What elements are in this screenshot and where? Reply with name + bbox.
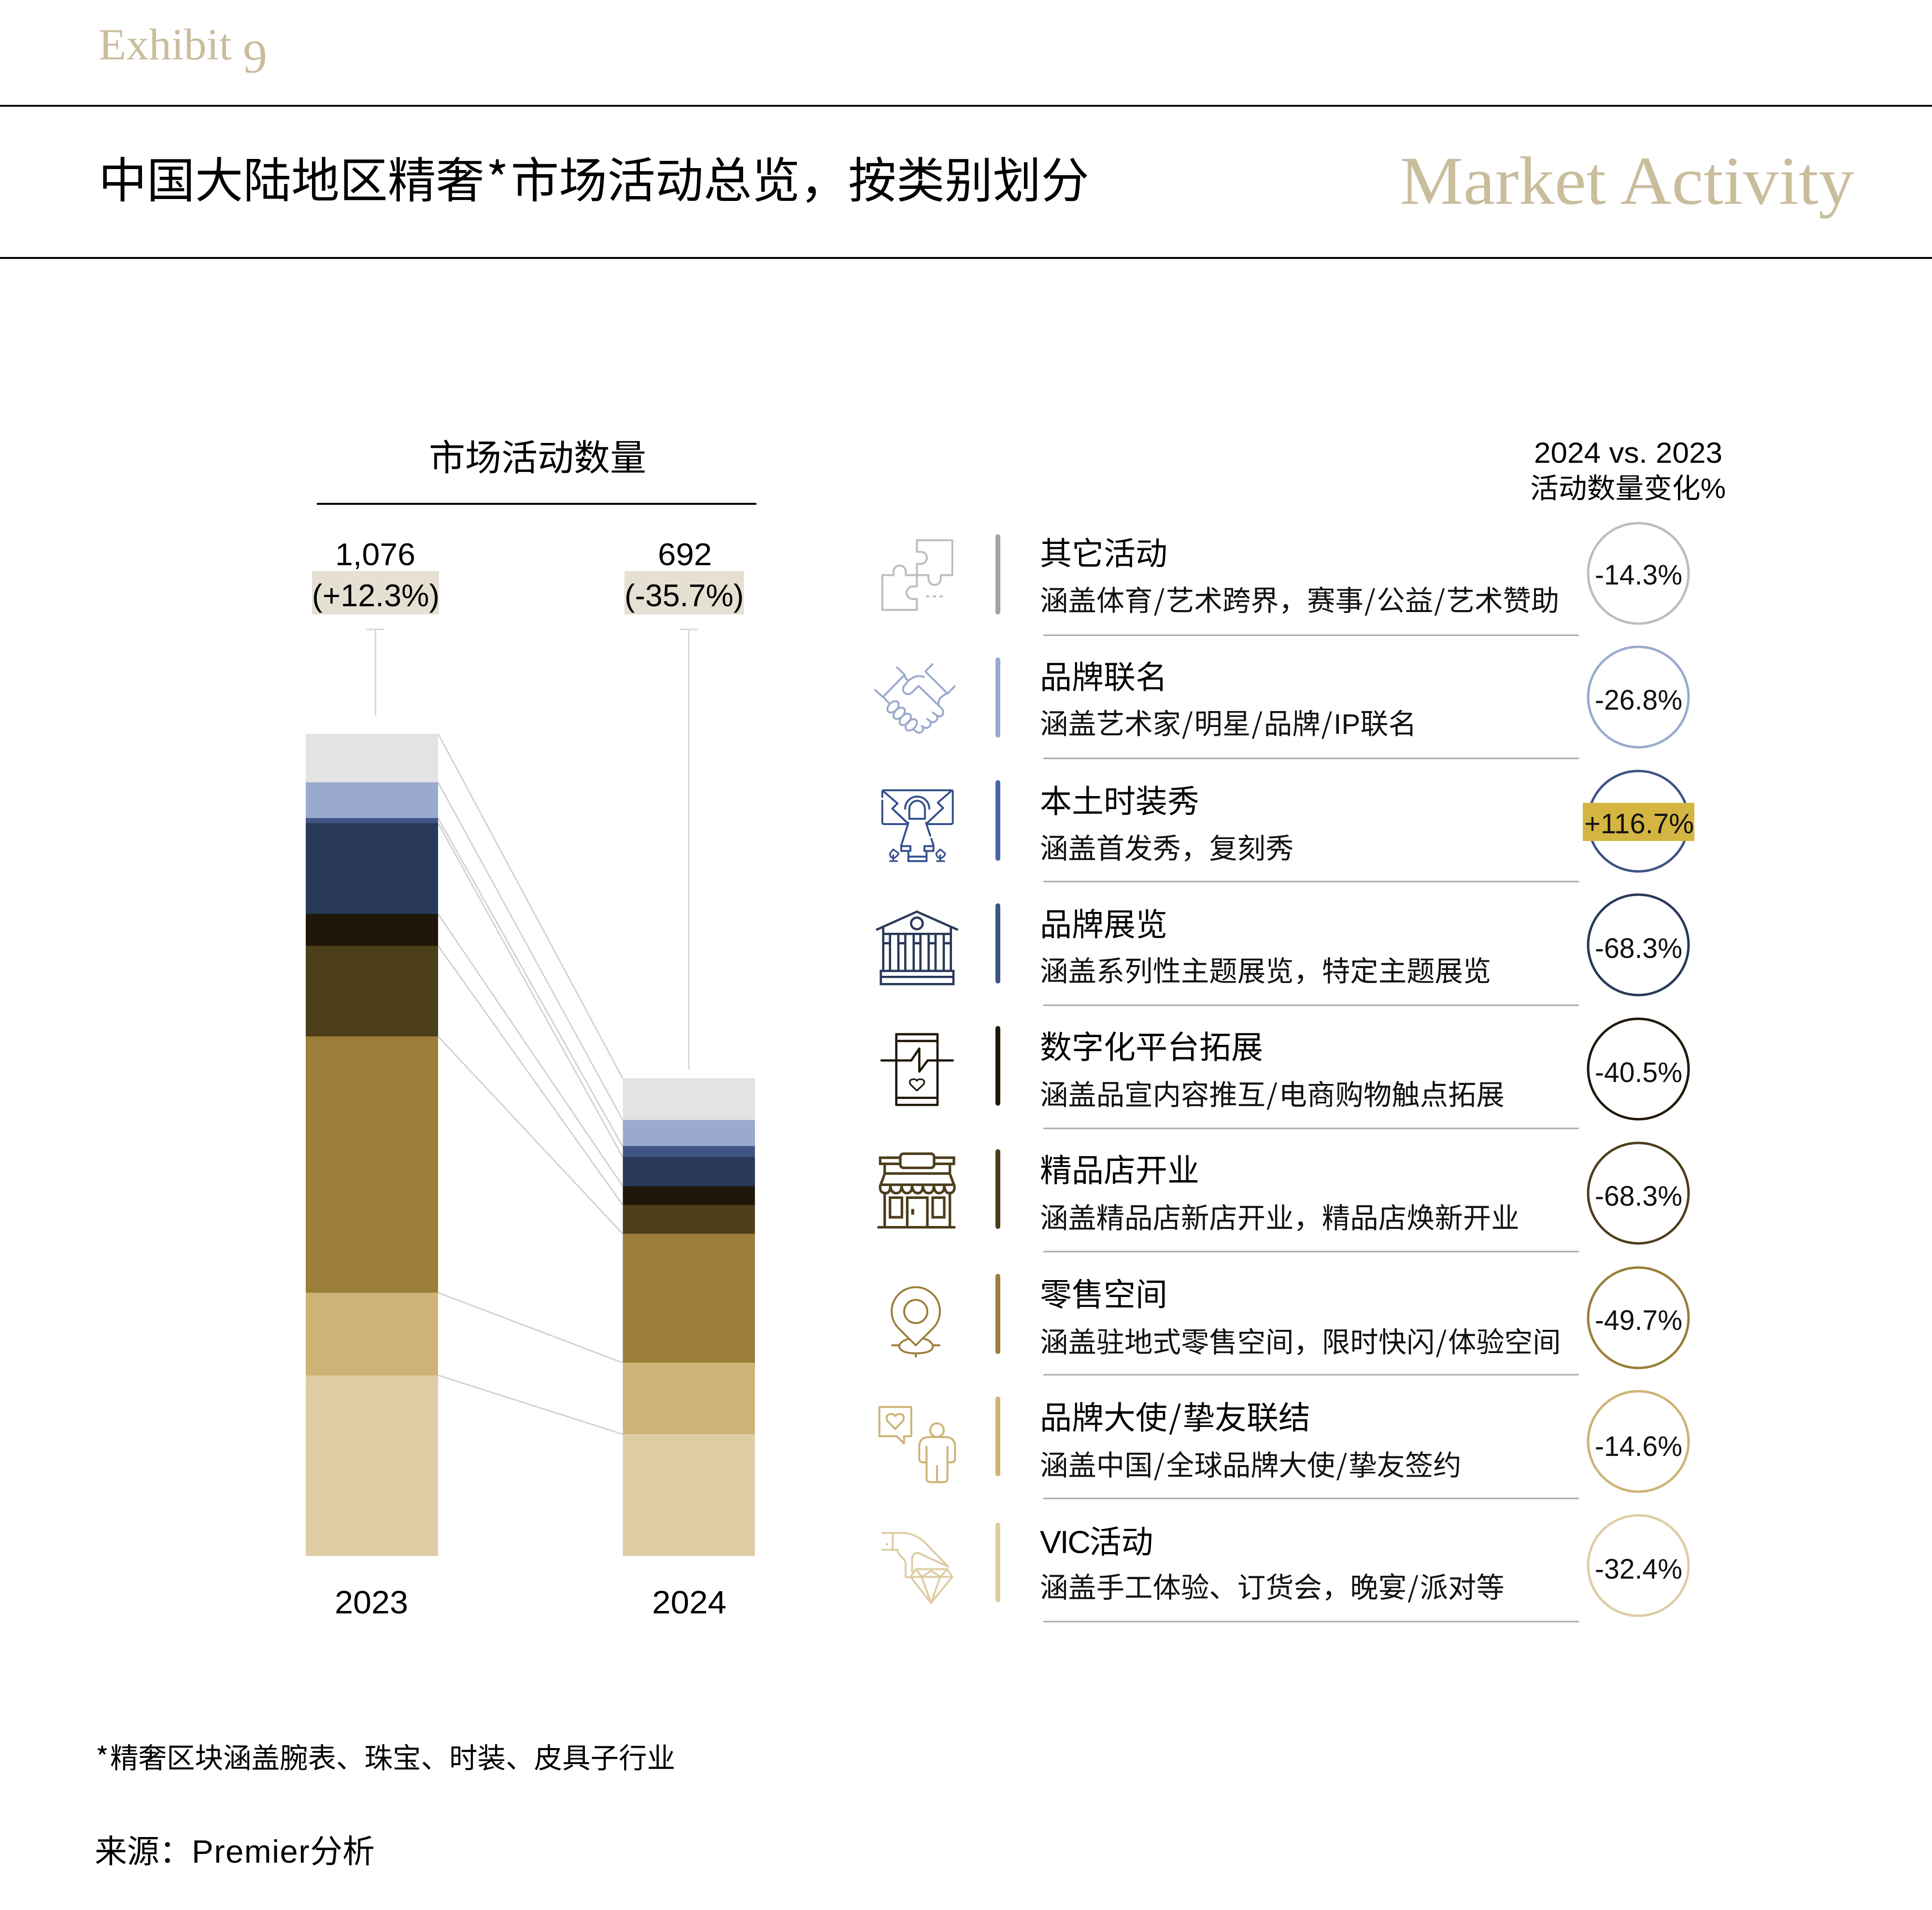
title: 数字化平台拓展	[1040, 1029, 1263, 1065]
icon: storefront	[878, 1154, 955, 1227]
row: 品牌大使/挚友联结	[880, 1391, 1689, 1499]
description: 涵盖驻地式零售空间，限时快闪/体验空间	[1040, 1319, 1561, 1360]
change badge	[1588, 1268, 1689, 1368]
icon: hand with diamond	[882, 1533, 952, 1603]
change badge	[1588, 523, 1689, 624]
change badge	[1588, 1515, 1689, 1616]
source: 来源：Premier分析	[95, 1834, 375, 1870]
icon: museum	[876, 912, 958, 984]
total label 2024: (-35.7%)	[625, 578, 744, 613]
title: 零售空间	[1040, 1277, 1167, 1312]
year label 2023: 2023	[335, 1584, 408, 1621]
row: 品牌展览	[876, 895, 1689, 1006]
change badge: -68.3%	[1595, 933, 1682, 964]
change badge	[1588, 647, 1689, 747]
row: 品牌联名	[875, 647, 1689, 759]
title: 本土时装秀	[1040, 784, 1199, 819]
description: 涵盖精品店新店开业，精品店焕新开业	[1040, 1203, 1520, 1234]
change column header: 2024 vs. 2023	[1534, 437, 1722, 469]
icon: phone	[881, 1034, 953, 1105]
total label 2023: (+12.3%)	[312, 578, 440, 613]
change badge highlighted	[1583, 771, 1694, 871]
row: 零售空间	[892, 1268, 1689, 1376]
change badge	[1588, 1143, 1689, 1243]
row: 数字化平台拓展	[881, 1019, 1689, 1129]
panel: stacked bar chart	[306, 438, 756, 1621]
footnote: *精奢区块涵盖腕表、珠宝、时装、皮具子行业	[96, 1735, 675, 1776]
row: 本土时装秀	[882, 771, 1694, 882]
exhibit label: Exhibit	[99, 20, 229, 69]
change column header	[1530, 437, 1726, 504]
section label: Market Activity: Market Activity	[1400, 143, 1854, 219]
title: 其它活动	[1040, 536, 1167, 571]
year label 2024: 2024	[652, 1584, 726, 1621]
total label 2024: 692	[658, 537, 712, 572]
bar 2023	[306, 734, 438, 1556]
bar 2024	[623, 1078, 755, 1556]
description: 涵盖中国/全球品牌大使/挚友签约	[1040, 1442, 1462, 1483]
icon: location pin	[892, 1287, 940, 1356]
icon: runway	[882, 790, 953, 861]
change badge: -14.6%	[1595, 1431, 1682, 1462]
change badge highlighted: +116.7%	[1584, 808, 1694, 840]
title: 精品店开业	[1040, 1153, 1199, 1188]
description: 涵盖系列性主题展览，特定主题展览	[1040, 956, 1491, 987]
change badge	[1588, 895, 1689, 995]
chart heading: 市场活动数量	[429, 438, 646, 478]
total label 2024	[625, 537, 744, 614]
title: 品牌大使/挚友联结	[1040, 1392, 1310, 1439]
row: 精品店开业	[878, 1143, 1689, 1252]
change badge: -49.7%	[1595, 1305, 1682, 1336]
row: VIC活动	[882, 1515, 1689, 1622]
icon: puzzle	[882, 540, 952, 610]
row: 其它活动	[882, 523, 1689, 636]
description: 涵盖体育/艺术跨界，赛事/公益/艺术赞助	[1040, 578, 1559, 619]
change badge: -26.8%	[1595, 684, 1682, 716]
total label 2023	[312, 537, 440, 614]
total label 2023: 1,076	[335, 537, 415, 572]
title: 品牌联名	[1040, 659, 1167, 695]
description: 涵盖首发秀，复刻秀	[1040, 833, 1294, 865]
change column header: 活动数量变化%	[1530, 473, 1726, 504]
description: 涵盖艺术家/明星/品牌/IP联名	[1040, 701, 1417, 742]
description: 涵盖手工体验、订货会，晚宴/派对等	[1040, 1565, 1505, 1606]
description: 涵盖品宣内容推互/电商购物触点拓展	[1040, 1072, 1505, 1113]
exhibit label: 9	[243, 31, 267, 83]
change badge	[1588, 1019, 1689, 1119]
icon: ambassador	[880, 1407, 955, 1482]
panel: activity list	[875, 523, 1694, 1622]
title: VIC活动	[1040, 1524, 1153, 1560]
change badge	[1588, 1391, 1689, 1492]
change badge: -32.4%	[1595, 1554, 1682, 1585]
icon: handshake	[875, 664, 955, 733]
change badge: -14.3%	[1595, 559, 1682, 591]
change badge: -40.5%	[1595, 1057, 1682, 1088]
title: 品牌展览	[1040, 907, 1167, 942]
title: 中国大陆地区精奢*市场活动总览，按类别划分	[99, 142, 1089, 212]
change badge: -68.3%	[1595, 1181, 1682, 1212]
